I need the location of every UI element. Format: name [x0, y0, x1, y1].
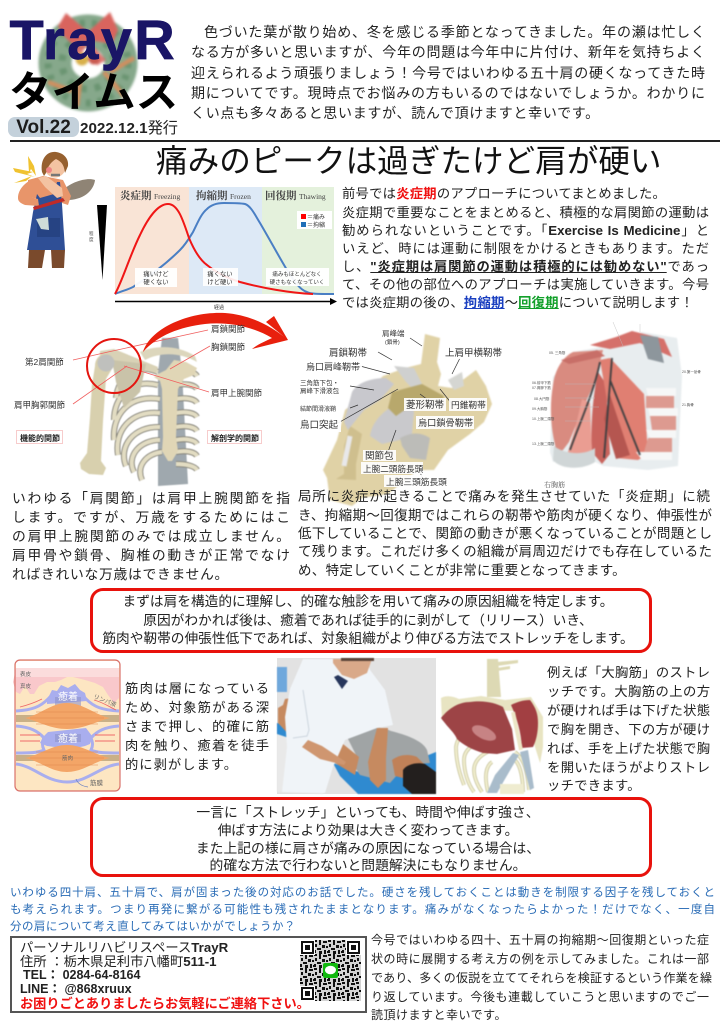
intro text: なる方が多いと思いますが、今年の問題は今年中に片付け、新年を気持ちよく — [191, 44, 705, 60]
icon: LINE QR code — [300, 940, 361, 1001]
label: 三角筋下包・ — [300, 378, 339, 387]
ribs — [456, 725, 529, 792]
note boxes: 硬さもなくなっていく — [270, 279, 324, 286]
apron — [27, 182, 65, 250]
arm holding mop — [18, 178, 40, 206]
humerus — [80, 354, 114, 475]
body text: stretch example: で胸を開き、下の方が硬け — [547, 722, 710, 737]
time axis — [115, 300, 331, 302]
chart: pain and stiffness across three phases: 回復期 — [265, 189, 297, 202]
red leader lines — [73, 330, 210, 404]
intro text: 色づいた葉が散り始め、冬を感じる季節となってきました。年の瀬は忙しく — [204, 24, 705, 40]
label: severity: 程度 — [89, 231, 94, 242]
figure: shoulder ligaments — [300, 328, 503, 506]
label: 肩甲上腕関節 — [211, 388, 263, 398]
head — [44, 156, 66, 178]
label: 06.前甲下筋 — [532, 380, 551, 385]
body text: stretch example: を開いたほうがよりストレ — [547, 760, 710, 775]
callout: stretch method matters: 的確な方法で行わないと問題解決にもなりません。 — [210, 858, 526, 873]
contact details — [20, 940, 310, 1011]
curve: stiffness — [115, 203, 334, 294]
callout: stretch method matters — [90, 797, 652, 877]
contact details: パーソナルリハビリスペースTrayR — [20, 940, 228, 955]
pectoralis minor and major — [600, 358, 648, 460]
clavicle and scapula — [100, 349, 158, 373]
label: 真皮 — [20, 682, 32, 690]
tag: functional joints: 機能的関節 — [20, 433, 60, 443]
body text: adhesion: ため、対象筋がある深 — [125, 700, 269, 715]
body text: last issue recap: 勧められないということです。「Exercise Is Medicine」と — [342, 223, 709, 238]
label: 09.大胸筋 — [532, 406, 548, 411]
label: 20.第一肋骨 — [682, 369, 701, 374]
label: 烏口突起 — [300, 419, 339, 431]
legend: ＝拘縮 — [307, 221, 325, 229]
figure: muscle adhesion diagram — [13, 659, 121, 792]
label: 肩鎖靭帯 — [329, 347, 368, 359]
body text: last issue recap: 前号では炎症期のアプローチについてまとめました。 — [342, 186, 666, 201]
skin layers — [13, 668, 119, 703]
label: 05. 三角筋 — [549, 350, 566, 355]
figure: pectoral muscles — [532, 322, 701, 489]
body text: stretch example: 例えば「大胸筋」のストレ — [547, 665, 710, 680]
volume badge: Vol.22 — [16, 117, 71, 138]
body text: stretch example: ッチです。大胸筋の上の方 — [547, 684, 710, 699]
chart: pain and stiffness across three phases: Frozen — [230, 192, 251, 201]
label: 菱形靭帯 — [406, 399, 445, 411]
label: 表皮 — [20, 670, 32, 678]
coat — [282, 659, 393, 793]
label: リンパ液 — [92, 692, 118, 709]
note boxes: 痛いけど — [143, 269, 169, 278]
focus circle — [87, 339, 141, 393]
closing text: 今号ではいわゆる四十、五十肩の拘縮期～回復期といった症 — [371, 933, 709, 947]
label: right pectoral caption: 右胸筋 — [544, 480, 565, 489]
callout: identify source of pain: 原因がわかれば後は、癒着であれば徒手的に剥がして（リリース）いき、 — [143, 613, 593, 628]
body text: last issue recap: では炎症期の後の、拘縮期〜回復期について説明します！ — [342, 295, 694, 310]
contact details: お困りごとありましたらお気軽にご連絡下さい。 — [20, 996, 310, 1011]
intro text: 期についてです。現時点でお悩みの方もいるのではないでしょうか。わかりに — [191, 85, 705, 101]
body text: anatomy right: 局所に炎症が起きることで痛みを発生させていた「炎症期」に続 — [298, 489, 710, 504]
callout: stretch method matters: 伸ばす方法により効果は大きく変わってきます。 — [218, 823, 518, 838]
body text: adhesion: 筋肉は層になっている — [125, 681, 269, 696]
upper ribs — [140, 347, 197, 362]
label: 関節包 — [365, 450, 394, 462]
pain bolts — [13, 156, 36, 183]
connective bands — [16, 715, 119, 761]
patient arm — [278, 698, 359, 775]
pain scale triangle — [89, 205, 107, 280]
title: タイムス: タイムス — [9, 70, 178, 117]
title: TrayR: TrayR — [10, 8, 177, 71]
patient head — [392, 755, 425, 779]
body text: last issue recap: 炎症期で重要なことをまとめると、積極的な肩関節の運動は — [342, 205, 709, 220]
contact details: LINE： @868xruux — [20, 982, 132, 996]
body text: anatomy right: め、特定していくことが非常に重要となってきます。 — [298, 563, 626, 578]
tag: anatomical joints — [208, 430, 262, 444]
apron pocket — [37, 218, 60, 237]
tag: anatomical joints: 解剖学的関節 — [211, 433, 259, 443]
body text: stretch example: ッチできます。 — [547, 778, 641, 793]
spine — [487, 659, 501, 697]
ribs — [636, 388, 678, 460]
label: 上肩甲横靭帯 — [445, 347, 503, 359]
blue summary text: いわゆる四十肩、五十肩で、肩が固まった後の対応のお話でした。硬さを残しておくことは動きを制限する因子を残しておくと — [10, 887, 715, 899]
trousers — [28, 250, 65, 268]
body text: anatomy left: いわゆる「肩関節」は肩甲上腕関節を指 — [12, 491, 290, 506]
body text: anatomy right: て残ります。これだけ多くの組織が肩周辺だけでも存在しているた — [298, 544, 712, 559]
chart: pain and stiffness across three phases: 経過 — [214, 304, 224, 311]
note boxes: 痛みもほとんどなく — [272, 270, 322, 278]
chart: pain and stiffness across three phases — [114, 187, 337, 311]
label: 円錐靭帯 — [451, 399, 486, 410]
label: 肩鎖関節 — [211, 324, 246, 334]
body text: anatomy right: 低下していることで、関節の動きが悪くなっていることが問題とし — [298, 526, 712, 541]
top chest — [590, 331, 672, 357]
label: 筋膜 — [90, 778, 104, 787]
patient shirt — [345, 727, 430, 783]
label: (鎖骨) — [385, 338, 400, 346]
closing text: 読頂けますと幸いです。 — [371, 1008, 507, 1022]
label: 10.上腕二頭筋 — [532, 416, 555, 421]
note boxes — [135, 268, 329, 287]
body text: stretch example: が硬ければ手は下げた状態 — [547, 703, 710, 718]
note boxes: 硬くない — [143, 278, 169, 286]
closing text: であり、多くの仮説を立ててそれらを検証するという作業を繰 — [371, 971, 712, 985]
intro text: くい点も多々あると思いますが、読んで頂けますと幸いです。 — [191, 105, 600, 121]
label: 肩峰端 — [382, 328, 405, 338]
chart: pain and stiffness across three phases: 炎症期 — [120, 189, 152, 202]
note boxes: 痛くない — [207, 269, 233, 278]
mop head — [63, 179, 95, 200]
label: 21.胸骨 — [682, 402, 694, 407]
label: 肩峰下滑液包 — [300, 386, 340, 395]
body text: last issue recap: て、その他の部位へのアプローチは実施していきます。今号 — [342, 277, 709, 292]
closing text: り返しています。今後も連載していこうと思いますのでご一 — [371, 990, 709, 1004]
chart: pain and stiffness across three phases: Thawing — [299, 192, 326, 201]
label: 結節間滑液鞘 — [300, 405, 336, 413]
note boxes: けど硬い — [207, 278, 233, 286]
mop handle — [33, 198, 65, 210]
shoulder girdle — [441, 696, 543, 763]
biceps — [567, 399, 592, 459]
contact details: 住所 ：栃木県足利市八幡町511-1 — [20, 954, 217, 969]
spine — [158, 338, 188, 486]
tag: functional joints — [16, 430, 62, 444]
closing text — [371, 933, 712, 1022]
label: 上腕三頭筋長頭 — [386, 476, 447, 487]
figure: pectoralis major on ribcage — [440, 658, 544, 794]
body text: anatomy right — [298, 489, 712, 578]
body text: adhesion: 肉を触り、癒着を徒手 — [125, 738, 269, 753]
chart: pain and stiffness across three phases: 拘縮期 — [196, 189, 228, 202]
body text: last issue recap: いえど、時には運動に制限をかけるときもあります。ただ — [342, 241, 709, 256]
fascia — [16, 692, 119, 782]
body text: last issue recap — [342, 186, 709, 310]
blue summary text — [10, 886, 715, 933]
hand on shoulder arm — [38, 176, 63, 198]
contact panel — [10, 936, 367, 1013]
legend — [297, 211, 332, 229]
issue date: 2022.12.1発行 — [80, 120, 178, 136]
label: 烏口鎖骨靭帯 — [418, 417, 473, 428]
blue summary text: も考えられます。つまり再発に繋がる可能性も残されたままとなります。痛みがなくなったらよかった！だけでなく、一度自 — [10, 904, 715, 916]
photo: therapist treating patient — [276, 657, 437, 795]
callout: stretch method matters: 一言に「ストレッチ」といっても、時間や伸ばす強さ、 — [196, 805, 540, 820]
label: 癒着 — [58, 690, 78, 703]
label: 烏口肩峰靭帯 — [306, 361, 360, 372]
body text: anatomy left — [12, 491, 290, 582]
body text: last issue recap: し、"炎症期は肩関節の運動は積極的には勧めない"であっ — [342, 259, 709, 274]
muscle bellies — [25, 703, 110, 729]
label: 癒着 — [58, 732, 78, 745]
label: 08.大円筋 — [534, 396, 550, 401]
callout: stretch method matters: また上記の様に肩さが痛みの原因になっている場合は、 — [196, 841, 540, 856]
background tissue — [550, 332, 682, 470]
arrow: big curved red arrow — [143, 313, 288, 352]
deltoid — [551, 350, 603, 452]
label: 胸鎖関節 — [211, 342, 246, 352]
contact details: TEL： 0284-64-8164 — [23, 968, 140, 982]
ribs — [114, 369, 197, 480]
label: 筋肉 — [62, 754, 73, 762]
table — [277, 721, 323, 794]
costal cartilage — [487, 750, 534, 793]
label: 上腕二頭筋長頭 — [363, 463, 424, 474]
label: 07.肩胛下筋 — [532, 385, 551, 390]
label: 13.上腕二頭筋 — [532, 441, 555, 446]
icon: christmas wreath — [36, 11, 140, 114]
therapist hands — [368, 728, 388, 788]
side pectoral — [511, 700, 538, 748]
lymph arrows — [20, 699, 116, 741]
adhesion blobs — [40, 684, 92, 749]
main heading: 痛みのピークは過ぎたけど肩が硬い — [156, 143, 662, 179]
legend: ＝痛み — [307, 213, 325, 221]
callout: identify source of pain: まずは肩を構造的に理解し、的確な触診を用いて痛みの原因組織を特定します。 — [122, 594, 613, 609]
label: 肩甲胸郭関節 — [14, 400, 66, 410]
body text: stretch example: れば、手を上げた状態で胸 — [547, 741, 710, 756]
intro text — [191, 24, 705, 121]
intro text: 迎えられるよう頑張りましょう！今号ではいわゆる五十肩の硬くなってきた時 — [191, 65, 705, 81]
sternum — [154, 360, 197, 461]
arm cut — [553, 446, 595, 468]
icon: woman with shoulder pain holding mop — [13, 152, 95, 268]
coracobrachialis — [591, 372, 610, 464]
body text: anatomy left: ればきれいな万歳はできません。 — [12, 567, 229, 582]
callout: identify source of pain: 筋肉や靭帯の伸張性低下であれば、対象組織がより伸びる方法でストレッチをします。 — [102, 631, 634, 646]
body text: adhesion — [125, 681, 269, 772]
curve: pain — [115, 204, 313, 294]
body text: anatomy left: します。ですが、万歳をするためにはこ — [12, 510, 290, 525]
figure: shoulder joints skeleton — [14, 312, 288, 486]
main pectoral — [441, 701, 515, 754]
neck and face — [333, 659, 372, 679]
blue summary text: 分の肩について考え直してみてはいかがでしょうか？ — [10, 921, 296, 933]
body text: anatomy left: 肩甲骨や鎖骨、胸椎の動きが正常でなけ — [12, 548, 290, 563]
closing text: 状の時に展開する考え方の例を示してみました。これは一部 — [371, 952, 709, 966]
masthead: wreath and newsletter title — [9, 8, 178, 117]
body text: anatomy left: の肩甲上腕関節のみでは成立しません。 — [12, 529, 290, 544]
body text: adhesion: さまで押し、的確に筋 — [125, 719, 269, 734]
label: 第2肩関節 — [25, 357, 64, 367]
body text: stretch example — [547, 665, 710, 793]
callout: identify source of pain — [90, 588, 652, 653]
body text: anatomy right: き、拘縮期～回復期ではこれらの靭帯や筋肉が硬くなり、伸張性が — [298, 508, 712, 523]
chart: pain and stiffness across three phases: Freezing — [154, 192, 180, 201]
torso sleeve — [28, 176, 71, 205]
body text: adhesion: 的に剥がします。 — [125, 757, 238, 772]
